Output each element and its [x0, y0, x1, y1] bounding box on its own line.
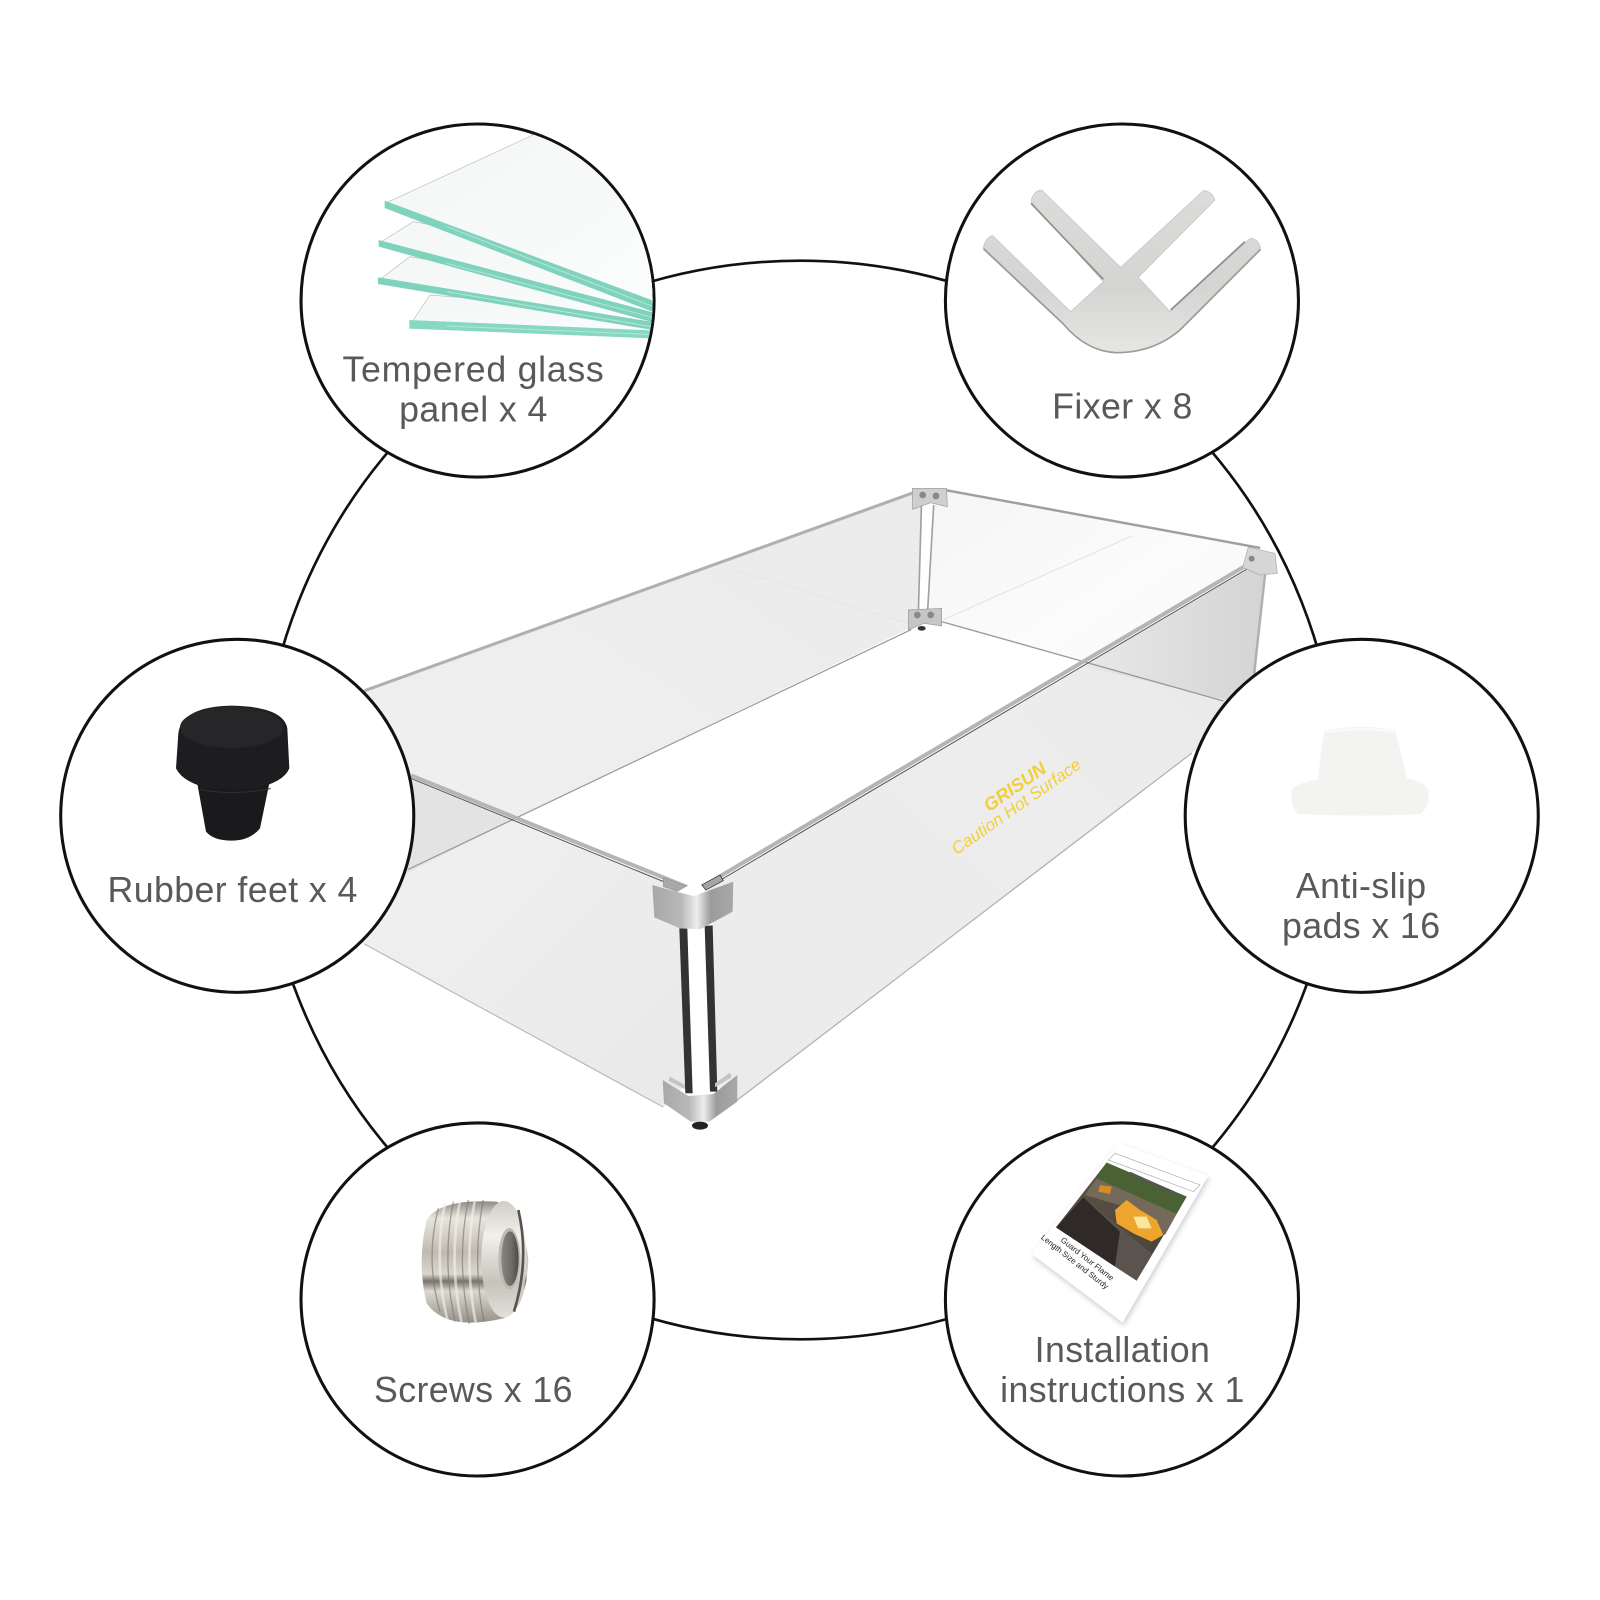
- back corner brackets: [908, 488, 1277, 631]
- manual caption: Guard Your Flame: [1059, 1236, 1116, 1283]
- manual caption: Length Size and Sturdy: [1039, 1233, 1110, 1291]
- panel: back right glass: [928, 489, 1265, 706]
- panel: front right glass: [704, 559, 1265, 1102]
- label: panel x 4: [399, 389, 548, 429]
- panel: rubber feet: [61, 639, 414, 992]
- glass wind guard product: [357, 488, 1277, 1130]
- faint floor lines: [735, 536, 1133, 624]
- label: Rubber feet x 4: [108, 870, 358, 910]
- panel: fixer: [945, 124, 1298, 477]
- panel: installation instructions: [945, 1123, 1298, 1476]
- panel: front left glass: [357, 770, 687, 1107]
- label: Screws x 16: [374, 1370, 573, 1410]
- label: Fixer x 8: [1052, 386, 1193, 426]
- circle outline: [1185, 639, 1538, 992]
- circle outline: [301, 1123, 654, 1476]
- icon: glass sheets: [378, 133, 657, 339]
- overlap of front right and back right glass: [1083, 559, 1265, 706]
- caution text: Caution Hot Surface: [948, 755, 1085, 858]
- panel: tempered glass panel: [301, 124, 657, 477]
- label: Installation: [1035, 1330, 1210, 1370]
- label: Anti-slip: [1296, 866, 1427, 906]
- circle outline: [945, 124, 1298, 477]
- label: Tempered glass: [342, 350, 604, 390]
- circle outline: [61, 639, 414, 992]
- panel: anti-slip pads: [1185, 639, 1538, 992]
- icon: anti-slip pad: [1291, 727, 1429, 816]
- circle outline: [301, 124, 654, 477]
- icon: instruction manual: [1032, 1143, 1209, 1325]
- label: instructions x 1: [1000, 1370, 1245, 1410]
- brand print on glass: [948, 755, 1085, 858]
- glass edges and rails: [364, 490, 1266, 1107]
- panel: back left glass: [357, 490, 921, 870]
- brand name: GRISUN: [979, 757, 1051, 816]
- overlap of front left and back left glass: [357, 760, 516, 898]
- connecting ring: [261, 261, 1339, 1339]
- front corner brackets and posts: [652, 875, 737, 1130]
- icon: rubber foot: [176, 706, 289, 841]
- floor opening: [516, 630, 1083, 890]
- label: pads x 16: [1282, 906, 1440, 946]
- panel: screws: [301, 1123, 654, 1476]
- circle outline: [945, 1123, 1298, 1476]
- icon: metal fixer: [983, 190, 1261, 353]
- icon: screw: [422, 1199, 528, 1324]
